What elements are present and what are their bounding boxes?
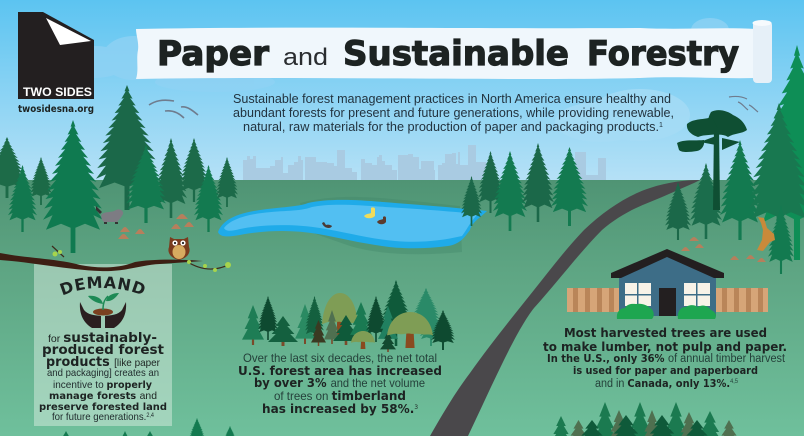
logo: [18, 12, 94, 115]
text: lumber: is used for paper and paperboard: [573, 365, 758, 377]
clouds: [63, 18, 729, 142]
demand text: preserve forested land: [39, 402, 167, 413]
sky background: [0, 0, 804, 182]
house: [567, 249, 768, 319]
tree cluster: middle: [242, 280, 455, 352]
title: Sustainable: [343, 34, 569, 74]
demand text: manage forests and: [49, 390, 157, 402]
text: lumber: [543, 325, 787, 390]
demand text: produced forest: [42, 342, 165, 358]
demand text: for future generations.: [52, 411, 155, 423]
icon: hands and seedling: [80, 293, 126, 328]
text: forest area: of trees on timberland: [274, 388, 406, 403]
demand text: and packaging] creates an: [47, 367, 159, 379]
demand text: for sustainably-: [48, 330, 157, 346]
title banner: [136, 28, 756, 79]
birds, left: [149, 100, 198, 118]
text: forest area: [238, 351, 442, 416]
pine tree: [677, 110, 747, 210]
text: lumber: to make lumber, not pulp and paper.: [543, 339, 787, 354]
text: forest area: has increased by 58%.: [262, 401, 420, 416]
demand text: 2,4: [146, 413, 155, 419]
title: [157, 34, 739, 74]
dirt mounds: [118, 214, 766, 262]
box: demand panel: [34, 264, 172, 426]
text: lumber: and in Canada, only 13%.: [595, 378, 737, 390]
fence: [567, 288, 768, 312]
lake: [218, 197, 487, 254]
ducks: [322, 207, 386, 228]
deer: [757, 217, 775, 251]
raccoon: [96, 206, 123, 224]
intro text: Sustainable forest management practices in North America ensure healthy and: [233, 92, 671, 106]
demand text: [39, 330, 167, 423]
text: forest area: Over the last six decades, the net total: [243, 351, 437, 365]
intro text: [233, 92, 674, 134]
title: Paper: [157, 34, 269, 74]
ground: [0, 180, 804, 436]
text: lumber: In the U.S., only 36% of annual timber harvest: [547, 353, 786, 365]
paper roll: [752, 20, 772, 83]
birds, right: [729, 96, 758, 112]
city skyline: [243, 145, 606, 181]
branch: [0, 246, 231, 272]
text: forest area: 3: [414, 404, 418, 411]
text: lumber: 4,5: [730, 379, 739, 385]
road: [430, 180, 700, 436]
demand heading: [60, 276, 145, 295]
text: forest area: by over 3% and the net volume: [254, 375, 425, 390]
title: Forestry: [587, 34, 739, 74]
logo: TWO SIDES: [23, 87, 92, 99]
tree cluster: bottom right: [551, 402, 739, 436]
intro text: abundant forests for present and future generations, while providing renewable,: [233, 106, 674, 120]
logo: twosidesna.org: [18, 104, 94, 115]
owl: [168, 237, 190, 260]
right forest near lake: [461, 143, 588, 231]
text: lumber: Most harvested trees are used: [564, 325, 767, 340]
demand text: incentive to properly: [53, 379, 152, 391]
text: forest area: U.S. forest area has increased: [238, 363, 442, 378]
title: and: [283, 44, 328, 71]
intro text: 1: [659, 122, 663, 129]
right forest, front: [720, 103, 804, 274]
intro text: natural, raw materials for the production of paper and packaging products.: [243, 120, 655, 134]
demand text: products [like paper: [46, 354, 160, 370]
tree cluster: bottom left: [60, 418, 236, 436]
left forest: [0, 85, 238, 253]
demand heading: DEMAND: [60, 276, 145, 295]
right forest, rear: [665, 45, 804, 260]
